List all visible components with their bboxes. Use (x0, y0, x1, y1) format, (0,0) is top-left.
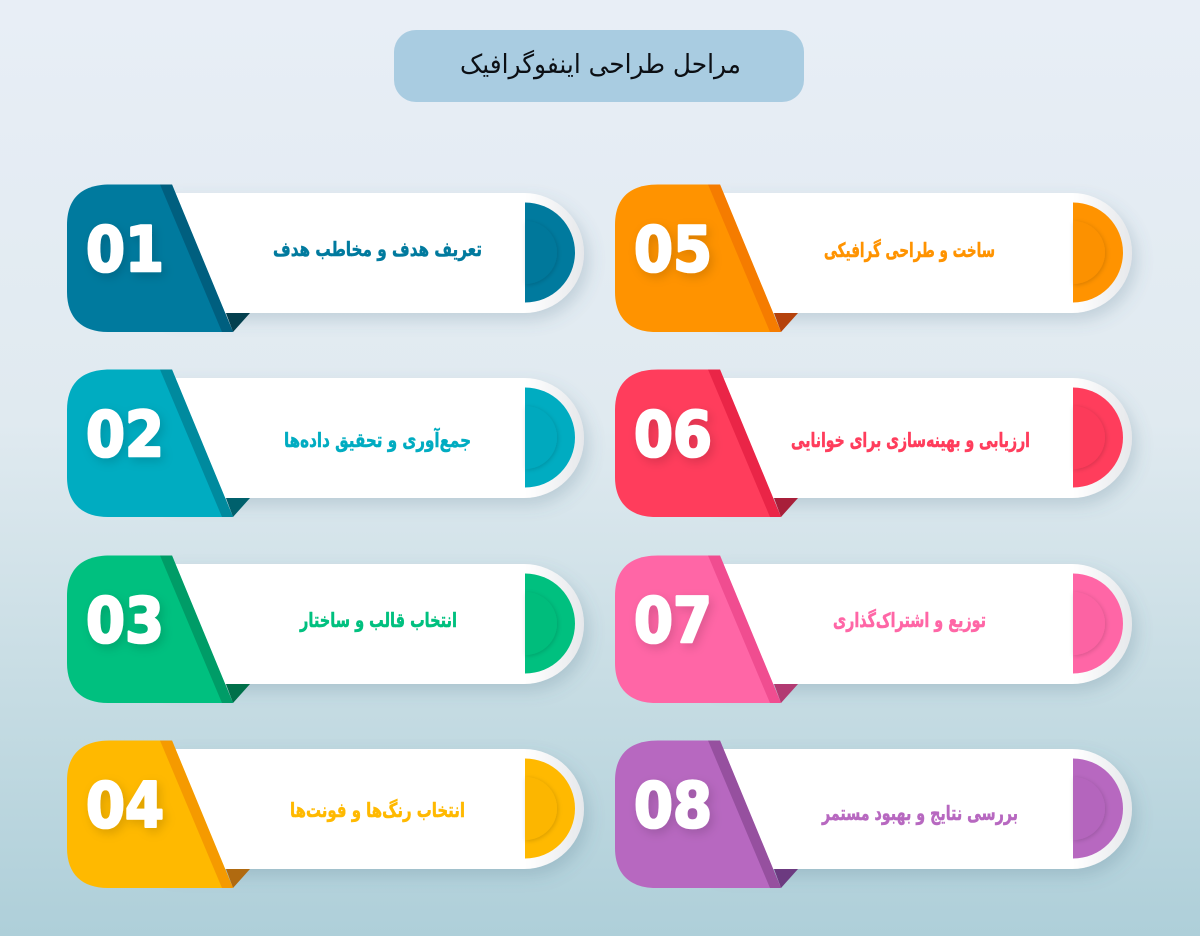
card 08 (615, 740, 1132, 888)
card 03: 03 (86, 584, 164, 657)
card 04: انتخاب رنگ‌ها و فونت‌ها (290, 798, 465, 822)
card 08: 08 (634, 769, 712, 842)
card 05: ساخت و طراحی گرافیکی (824, 238, 995, 262)
card 07: 07 (634, 584, 712, 657)
card 02: جمع‌آوری و تحقیق داده‌ها (284, 427, 471, 452)
card 03: انتخاب قالب و ساختار (299, 608, 457, 632)
card 08: بررسی نتایج و بهبود مستمر (821, 801, 1018, 825)
card 07: توزیع و اشتراک‌گذاری (833, 608, 986, 632)
card 05 (615, 184, 1132, 332)
card 06: ارزیابی و بهینه‌سازی برای خوانایی (791, 428, 1030, 452)
card 01 (67, 184, 584, 332)
title box (394, 30, 804, 102)
card 05: 05 (634, 213, 712, 286)
title box: مراحل طراحی اینفوگرافیک (460, 49, 741, 80)
card 03 (67, 556, 584, 703)
card 01: تعریف هدف و مخاطب هدف (273, 237, 482, 261)
card 06 (615, 370, 1132, 517)
card 04: 04 (86, 769, 164, 842)
card 02: 02 (86, 398, 164, 471)
card 07 (615, 556, 1132, 703)
card 06: 06 (634, 398, 712, 471)
card 02 (67, 370, 584, 517)
card 01: 01 (86, 213, 164, 286)
card 04 (67, 740, 584, 888)
